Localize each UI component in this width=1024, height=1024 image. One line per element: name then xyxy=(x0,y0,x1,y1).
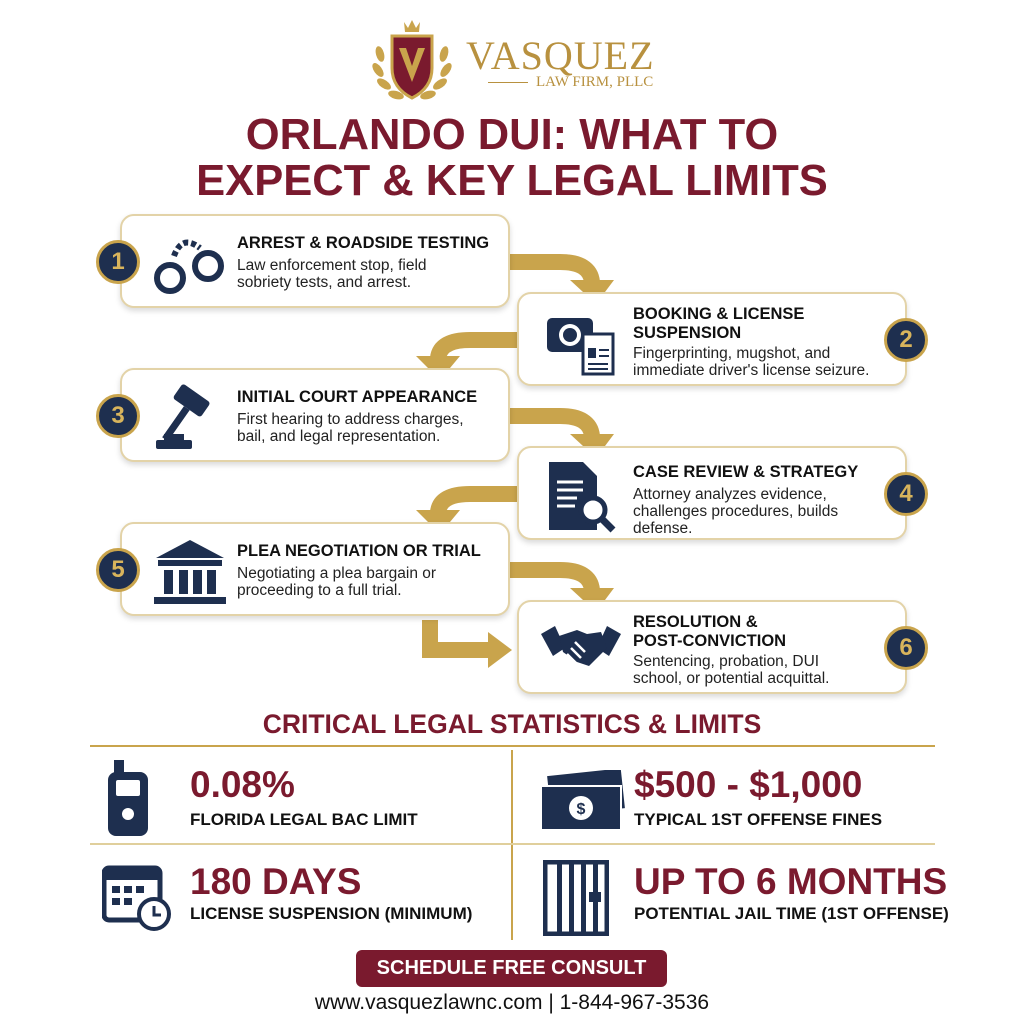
step 5: PLEA NEGOTIATION OR TRIAL xyxy=(237,542,481,560)
number 3: 3 xyxy=(111,402,125,429)
icon: camera and police id xyxy=(547,318,614,376)
step 4: CASE REVIEW & STRATEGY xyxy=(633,463,858,481)
title: EXPECT & KEY LEGAL LIMITS xyxy=(196,157,828,205)
icon: gavel xyxy=(156,384,210,449)
stat: jail xyxy=(543,860,949,936)
button: schedule consult: SCHEDULE FREE CONSULT xyxy=(377,957,646,979)
button: schedule consult xyxy=(356,950,667,987)
step 4: defense. xyxy=(633,520,692,537)
arrows xyxy=(416,254,614,668)
step 3 xyxy=(120,368,510,462)
icon: jail bars xyxy=(543,860,609,936)
step 2: immediate driver's license seizure. xyxy=(633,362,869,379)
number 5: 5 xyxy=(111,556,125,583)
step 2: Fingerprinting, mugshot, and xyxy=(633,345,830,362)
step 4: Attorney analyzes evidence, xyxy=(633,486,827,503)
number 1 xyxy=(96,240,140,284)
icon: money xyxy=(542,770,625,829)
icon: calendar clock xyxy=(102,866,171,931)
title: ORLANDO DUI: WHAT TO xyxy=(246,111,778,159)
step 6: Sentencing, probation, DUI xyxy=(633,653,819,670)
contact line: www.vasquezlawnc.com | 1-844-967-3536 xyxy=(315,991,709,1014)
step 2: BOOKING & LICENSE xyxy=(633,305,804,323)
stat: suspension: LICENSE SUSPENSION (MINIMUM) xyxy=(190,904,472,923)
number 1: 1 xyxy=(111,248,125,275)
step 4: challenges procedures, builds xyxy=(633,503,838,520)
stat: suspension: 180 DAYS xyxy=(190,861,361,902)
stat: BAC: FLORIDA LEGAL BAC LIMIT xyxy=(190,810,418,829)
stat: BAC: 0.08% xyxy=(190,764,295,805)
step 5 xyxy=(120,522,510,616)
number 4 xyxy=(884,472,928,516)
icon: courthouse xyxy=(154,540,226,604)
icon: breathalyzer xyxy=(108,760,148,836)
step 1: Law enforcement stop, field xyxy=(237,257,427,274)
step 5: proceeding to a full trial. xyxy=(237,582,402,599)
stat: fines xyxy=(542,764,882,829)
step 5: Negotiating a plea bargain or xyxy=(237,565,436,582)
step 6: POST-CONVICTION xyxy=(633,632,786,650)
number 6 xyxy=(884,626,928,670)
step 6: RESOLUTION & xyxy=(633,613,758,631)
logo: VASQUEZ xyxy=(466,33,655,78)
step 6 xyxy=(517,600,907,694)
number 5 xyxy=(96,548,140,592)
step 1: ARREST & ROADSIDE TESTING xyxy=(237,234,489,252)
step 2: SUSPENSION xyxy=(633,324,741,342)
stat: jail: UP TO 6 MONTHS xyxy=(634,861,947,902)
step 2 xyxy=(517,292,907,386)
number 2 xyxy=(884,318,928,362)
stat: fines: TYPICAL 1ST OFFENSE FINES xyxy=(634,810,882,829)
stat: suspension xyxy=(102,861,472,931)
number 4: 4 xyxy=(899,480,913,507)
step 1 xyxy=(120,214,510,308)
stat: BAC xyxy=(108,760,418,836)
stats heading: CRITICAL LEGAL STATISTICS & LIMITS xyxy=(263,709,761,739)
step 3: First hearing to address charges, xyxy=(237,411,464,428)
icon: handcuffs xyxy=(154,240,224,294)
step 1: sobriety tests, and arrest. xyxy=(237,274,411,291)
logo xyxy=(372,20,655,100)
step 3: INITIAL COURT APPEARANCE xyxy=(237,388,477,406)
step 4 xyxy=(517,446,907,540)
stat: jail: POTENTIAL JAIL TIME (1ST OFFENSE) xyxy=(634,904,949,923)
number 2: 2 xyxy=(899,326,913,353)
icon: document with magnifier xyxy=(549,462,616,532)
number 6: 6 xyxy=(899,634,913,661)
logo: LAW FIRM, PLLC xyxy=(536,74,653,90)
number 3 xyxy=(96,394,140,438)
step 3: bail, and legal representation. xyxy=(237,428,440,445)
icon: money: $ xyxy=(577,801,586,818)
step 6: school, or potential acquittal. xyxy=(633,670,829,687)
title xyxy=(196,111,828,205)
stat: fines: $500 - $1,000 xyxy=(634,764,862,805)
icon: handshake xyxy=(541,626,621,666)
